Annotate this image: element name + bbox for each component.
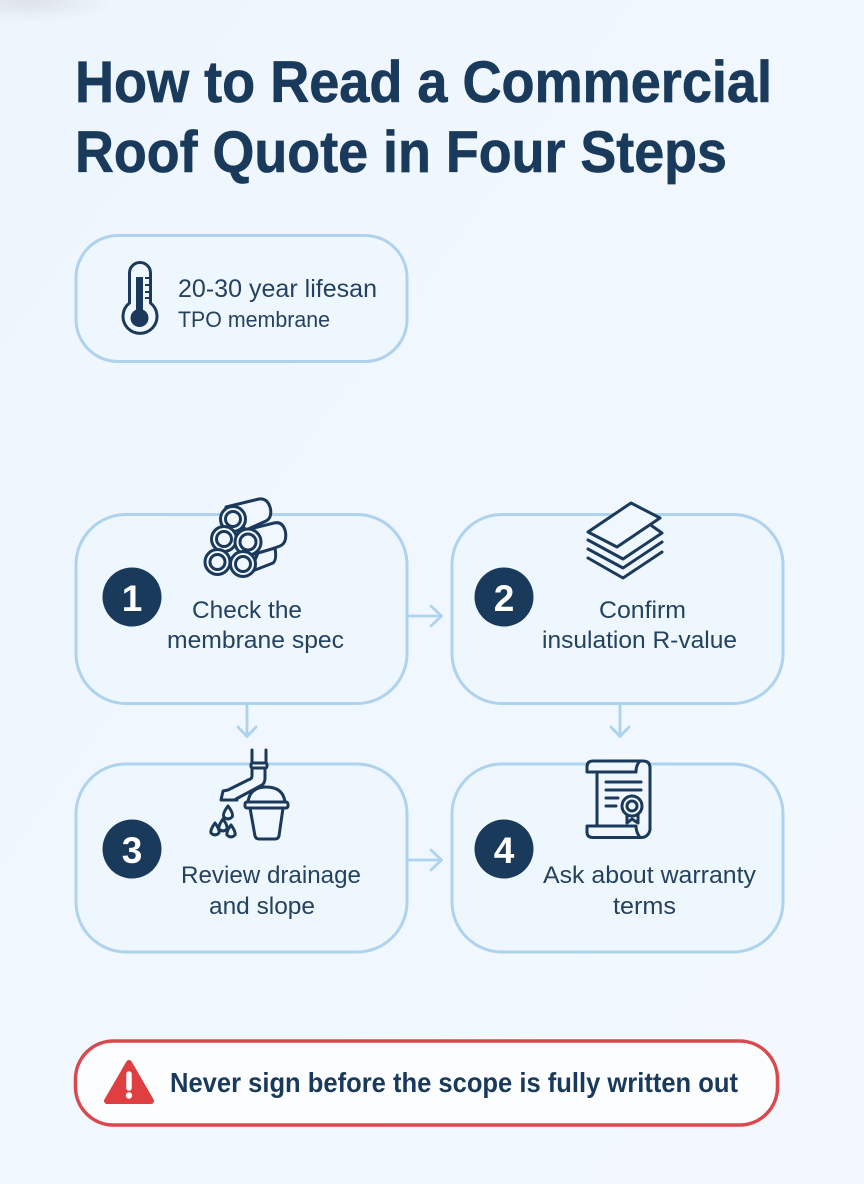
badge 1 [102,568,162,626]
title: Roof Quote in Four Steps [75,120,727,185]
arrow: step 1 to 3 [238,706,256,736]
icon: warning triangle [107,1063,151,1101]
label: step 2: insulation R-value [542,627,737,654]
arrow: step 2 to 4 [611,706,629,736]
callout: warning [76,1041,778,1125]
icon: warranty scroll [587,761,650,838]
panel: step 4 [452,761,783,952]
icon: insulation layers [588,503,662,578]
badge 2: 2 [494,578,514,619]
stat text: 20-30 year lifesan [178,275,377,303]
icon: membrane rolls [205,499,286,576]
stat text [178,275,377,332]
label: step 1: membrane spec [167,627,344,654]
panel: lifespan stat [76,236,407,362]
label: step 3 [181,862,361,920]
callout text: Never sign before the scope is fully written out [170,1067,738,1098]
badge 2 [474,568,534,626]
label: step 2: Confirm [599,597,686,624]
badge 3 [102,820,162,878]
panel: step 1 [76,499,407,704]
badge 1: 1 [122,578,142,619]
icon: drainage and bucket [211,750,288,839]
badge 4: 4 [494,830,515,871]
arrow: step 3 to 4 [408,850,442,870]
label: step 3: Review drainage [181,862,361,889]
stat text: TPO membrane [178,307,330,332]
label: step 4 [543,862,756,920]
badge 4 [474,820,534,878]
label: step 4: Ask about warranty [543,862,756,889]
title: How to Read a Commercial [75,50,772,115]
badge 3: 3 [122,830,142,871]
label: step 2 [542,597,737,654]
label: step 1 [167,597,344,654]
label: step 4: terms [613,893,676,920]
icon: thermometer [123,262,157,333]
arrow: step 1 to 2 [408,606,442,626]
label: step 1: Check the [192,597,302,624]
title [75,50,772,185]
label: step 3: and slope [209,893,315,920]
panel: step 2 [452,503,783,704]
panel: step 3 [76,750,407,952]
